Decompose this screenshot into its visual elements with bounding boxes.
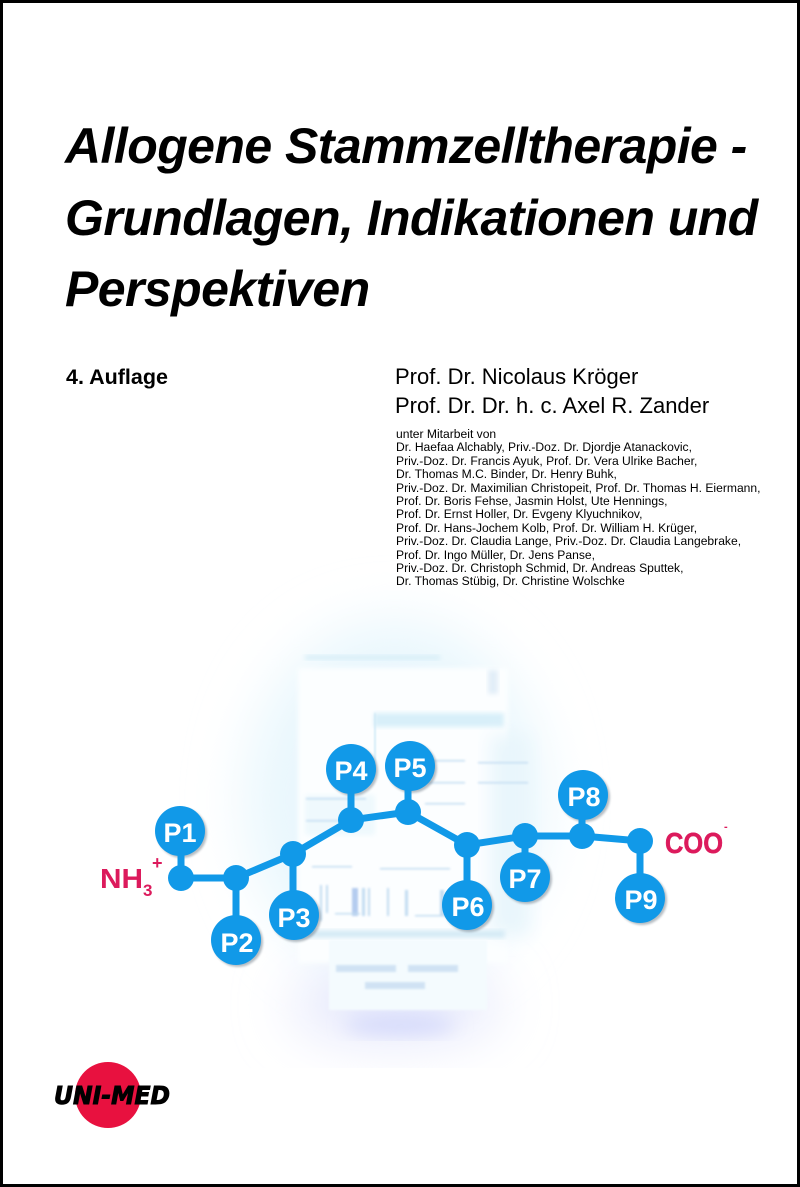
- N-terminus label: +: [152, 853, 163, 873]
- residue labels: P7: [508, 864, 542, 894]
- C-terminus label: COO: [665, 828, 723, 860]
- side chains: [181, 766, 640, 940]
- backbone: [181, 812, 640, 878]
- authors: [395, 364, 709, 418]
- residue labels: P8: [567, 782, 601, 812]
- residue labels: P6: [451, 892, 485, 922]
- edition label: 4. Auflage: [66, 365, 168, 389]
- contributors list: [396, 427, 760, 588]
- residue labels: P9: [624, 885, 658, 915]
- contributors list: Dr. Haefaa Alchably, Priv.-Doz. Dr. Djordje Atanackovic,: [396, 440, 692, 454]
- residue balls: [155, 741, 665, 965]
- residue labels: P4: [334, 756, 368, 786]
- title: [64, 118, 759, 317]
- C-terminus label: -: [724, 821, 728, 833]
- authors: Prof. Dr. Dr. h. c. Axel R. Zander: [395, 393, 709, 418]
- residue labels: P3: [277, 903, 311, 933]
- contributors list: Prof. Dr. Ernst Holler, Dr. Evgeny Klyuchnikov,: [396, 507, 642, 521]
- contributors list: unter Mitarbeit von: [396, 427, 496, 441]
- authors: Prof. Dr. Nicolaus Kröger: [395, 364, 638, 389]
- residue labels: P2: [220, 928, 254, 958]
- contributors list: Prof. Dr. Ingo Müller, Dr. Jens Panse,: [396, 548, 595, 562]
- contributors list: Priv.-Doz. Dr. Claudia Lange, Priv.-Doz. Dr. Claudia Langebrake,: [396, 534, 741, 548]
- title: Perspektiven: [65, 261, 370, 317]
- contributors list: Priv.-Doz. Dr. Christoph Schmid, Dr. Andreas Sputtek,: [396, 561, 683, 575]
- contributors list: Dr. Thomas M.C. Binder, Dr. Henry Buhk,: [396, 467, 617, 481]
- contributors list: Prof. Dr. Boris Fehse, Jasmin Holst, Ute Hennings,: [396, 494, 668, 508]
- residue labels: P1: [163, 818, 197, 848]
- logo disc: [75, 1062, 141, 1128]
- N-terminus label: NH: [100, 863, 143, 894]
- N-terminus label: [100, 853, 163, 900]
- contributors list: Priv.-Doz. Dr. Maximilian Christopeit, Prof. Dr. Thomas H. Eiermann,: [396, 481, 760, 495]
- residue labels: P5: [393, 753, 427, 783]
- N-terminus label: 3: [143, 881, 152, 900]
- contributors list: Priv.-Doz. Dr. Francis Ayuk, Prof. Dr. Vera Ulrike Bacher,: [396, 454, 697, 468]
- contributors list: Dr. Thomas Stübig, Dr. Christine Wolschke: [396, 574, 625, 588]
- backbone nodes: [168, 799, 653, 891]
- chain shadow: [157, 743, 667, 967]
- title: Grundlagen, Indikationen und: [65, 190, 758, 246]
- residue labels: [163, 753, 658, 958]
- contributors list: Prof. Dr. Hans-Jochem Kolb, Prof. Dr. William H. Krüger,: [396, 521, 697, 535]
- logo wordmark: UNI-MED: [54, 1081, 170, 1110]
- title: Allogene Stammzelltherapie -: [65, 118, 747, 174]
